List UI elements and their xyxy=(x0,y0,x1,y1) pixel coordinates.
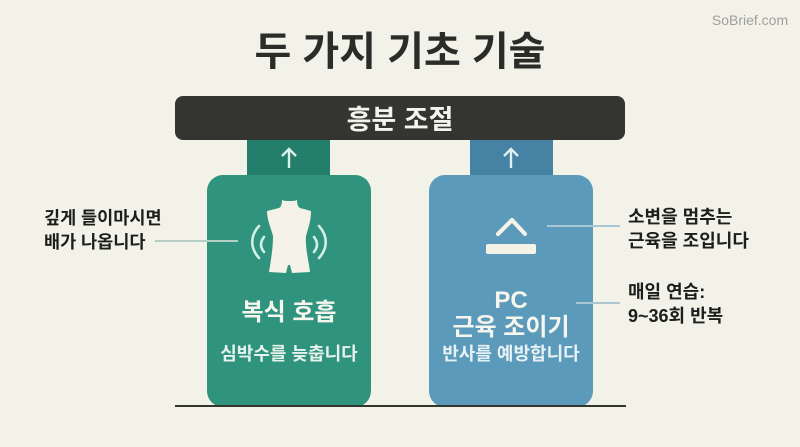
callout text xyxy=(628,282,723,326)
callout text xyxy=(44,208,162,252)
connector: left xyxy=(247,139,330,176)
top bar: arousal control xyxy=(175,96,625,140)
panel subtext: 심박수를 늦춥니다 xyxy=(220,344,358,364)
title: 두 가지 기초 기술 xyxy=(255,30,545,74)
callout text: 깊게 들이마시면 xyxy=(44,208,162,228)
arrow: left xyxy=(281,147,297,168)
panel subtext: 반사를 예방합니다 xyxy=(442,344,580,364)
panel: belly breathing xyxy=(207,175,371,407)
callout: daily practice xyxy=(576,282,723,326)
bar label: 흥분 조절 xyxy=(347,105,453,135)
callout text: 9~36회 반복 xyxy=(628,306,723,326)
leader line xyxy=(155,240,238,242)
watermark: SoBrief.com xyxy=(712,12,788,28)
baseline xyxy=(175,405,626,407)
callout text: 배가 나옵니다 xyxy=(44,232,145,252)
connector: right xyxy=(470,139,553,176)
callout text: 매일 연습: xyxy=(628,282,705,302)
callout: belly inhale xyxy=(44,208,238,252)
arrow: right xyxy=(503,147,519,168)
leader line xyxy=(576,302,620,304)
panel heading: PC xyxy=(494,287,528,314)
panel heading xyxy=(452,287,570,341)
callout text: 근육을 조입니다 xyxy=(628,231,749,251)
callout: stop urination xyxy=(547,207,749,251)
panel heading: 근육 조이기 xyxy=(452,314,570,341)
panel: PC muscle xyxy=(429,175,593,407)
icon: torso with waves xyxy=(250,200,328,273)
callout text: 소변을 멈추는 xyxy=(628,207,732,227)
panel heading: 복식 호흡 xyxy=(242,299,336,326)
callout text xyxy=(628,207,749,251)
leader line xyxy=(547,225,620,226)
icon: lift chevron and bar xyxy=(486,218,536,254)
